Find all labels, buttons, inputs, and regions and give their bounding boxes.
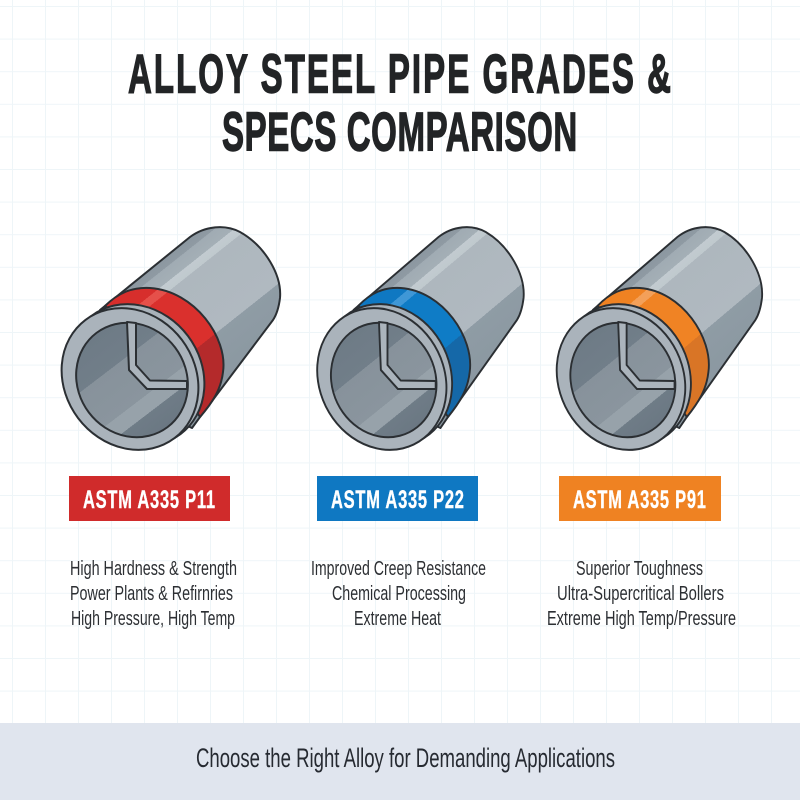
panel: ASTM A335 P91	[530, 227, 762, 630]
footer banner: Choose the Right Alloy for Demanding Applications	[196, 743, 615, 773]
label: P11: ASTM A335 P11	[83, 487, 215, 514]
panel: ASTM A335 P11	[34, 227, 280, 630]
title	[128, 43, 671, 163]
label: P22	[317, 476, 478, 521]
icon: pipe with red band	[34, 227, 280, 477]
text: P22 details: Chemical Processing	[332, 583, 466, 605]
text: P11 details: Power Plants & Refirnries	[70, 583, 233, 605]
title: ALLOY STEEL PIPE GRADES &	[128, 43, 671, 105]
label: P91: ASTM A335 P91	[573, 487, 706, 514]
footer banner	[0, 723, 800, 800]
text: P11 details: High Pressure, High Temp	[71, 608, 235, 630]
text: P22 details: Extreme Heat	[354, 608, 441, 630]
icon: pipe with orange band	[530, 227, 762, 477]
label: P22: ASTM A335 P22	[331, 487, 464, 514]
text: P91 details	[547, 558, 736, 630]
text: P91 details: Superior Toughness	[576, 558, 703, 580]
text: P22 details	[311, 558, 486, 630]
text: P22 details: Improved Creep Resistance	[311, 558, 486, 580]
text: P11 details	[70, 558, 237, 630]
text: P11 details: High Hardness & Strength	[70, 558, 237, 580]
panel: ASTM A335 P22	[291, 227, 524, 630]
title: SPECS COMPARISON	[222, 101, 577, 163]
icon: pipe with blue band	[291, 227, 524, 477]
label: P11	[69, 476, 230, 521]
label: P91	[559, 476, 721, 521]
text: P91 details: Ultra-Supercritical Bollers	[557, 583, 724, 605]
